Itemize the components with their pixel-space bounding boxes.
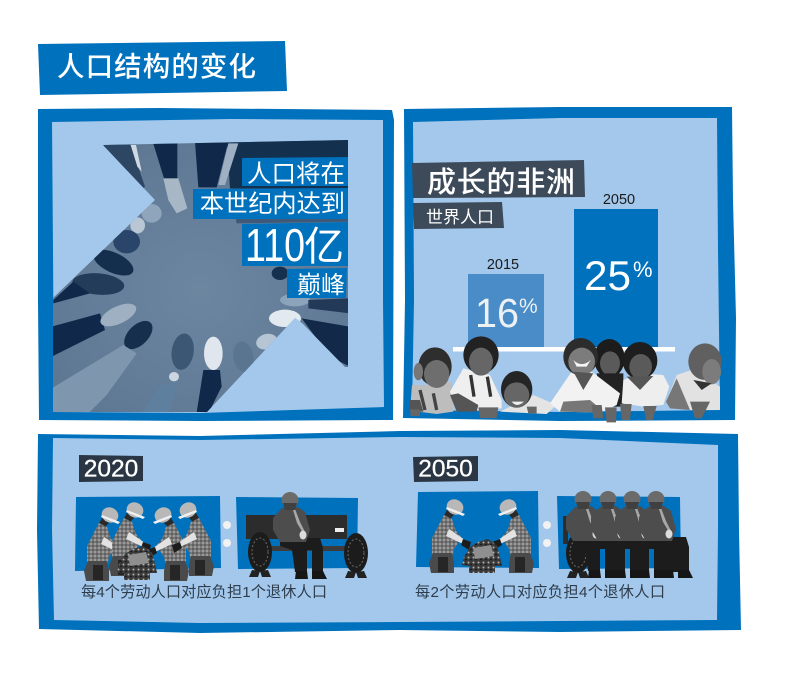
workers illustration: two workers — [416, 491, 539, 573]
page title banner: 人口结构的变化 — [57, 51, 256, 82]
callout: reach 11 billion peak: 人口将在 — [247, 160, 345, 188]
callout: reach 11 billion peak — [193, 157, 348, 299]
bar: 2050 25%: 25 — [584, 252, 631, 299]
bar: 2050 25% — [574, 192, 658, 348]
subheading: world population — [413, 202, 504, 229]
callout: reach 11 billion peak: 本世纪内达到 — [200, 191, 345, 218]
panel: population peak — [38, 108, 394, 421]
bar: 2015 16%: % — [519, 295, 538, 318]
bar: 2015 16%: 2015 — [487, 257, 519, 273]
callout: reach 11 billion peak: 110 — [245, 219, 305, 271]
photo cutout: schoolchildren — [409, 336, 722, 422]
callout: reach 11 billion peak: 巅峰 — [297, 272, 345, 299]
year tag: 2050: 2050 — [418, 456, 473, 482]
ratio colon — [223, 521, 231, 547]
panel: workers per retiree — [37, 430, 741, 633]
bar: 2015 16%: 16 — [475, 290, 519, 336]
year tag: 2020: 2020 — [84, 456, 138, 482]
caption: 2020 ratio: 每4个劳动人口对应负担1个退休人口 — [81, 583, 327, 601]
heading: growing Africa: 成长的非洲 — [427, 166, 575, 199]
caption: 2050 ratio: 每2个劳动人口对应负担4个退休人口 — [415, 583, 665, 601]
page title banner — [38, 41, 287, 95]
photo: circle of feet — [50, 137, 350, 417]
section: 2020 — [75, 455, 368, 601]
subheading: world population: 世界人口 — [426, 208, 494, 227]
bar chart: share of world population — [453, 192, 675, 352]
section: 2050 — [413, 456, 693, 601]
retirees illustration: four on bench — [557, 491, 693, 578]
bar: 2015 16% — [468, 257, 544, 348]
retiree illustration: one on bench — [236, 492, 368, 579]
callout: reach 11 billion peak: 亿 — [304, 225, 344, 269]
bar: 2050 25%: % — [633, 257, 653, 282]
bar: 2050 25%: 2050 — [603, 192, 635, 208]
workers illustration: four workers — [75, 496, 221, 581]
ratio colon — [543, 521, 551, 547]
panel: growing Africa — [403, 107, 736, 422]
